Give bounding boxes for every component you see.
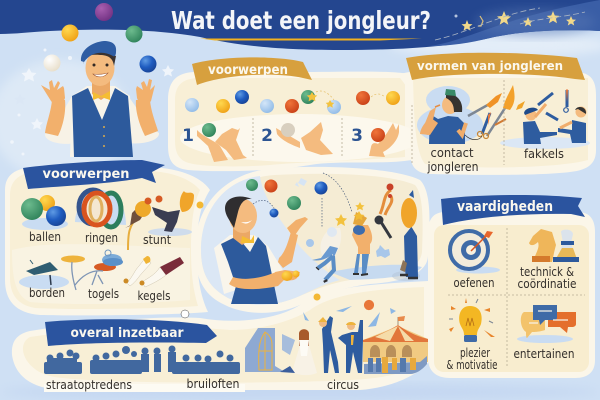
panel: vormen van jongleren: [398, 53, 596, 175]
label: oefenen: oefenen: [454, 276, 494, 290]
label: contact jongleren: jongleren: [427, 160, 478, 174]
banner: vaardigheden: [441, 195, 585, 225]
label: fakkels: fakkels: [524, 147, 564, 161]
crowd: bruiloften: [172, 350, 240, 374]
panel: voorwerpen steps: [168, 57, 420, 171]
performer 3 with flame: [392, 190, 420, 281]
label: plezier en motivatie: & motivatie: [446, 358, 498, 372]
label: plezier en motivatie: plezier: [460, 346, 490, 360]
step 3: [351, 123, 399, 157]
label: straatoptredens: straatoptredens: [46, 378, 132, 392]
label: bruiloften: bruiloften: [186, 377, 240, 391]
panel: overal inzetbaar: [12, 281, 430, 392]
label: entertainen: entertainen: [514, 347, 574, 361]
illustration: torches: [465, 85, 515, 140]
banner: overal inzetbaar: overal inzetbaar: [70, 326, 184, 341]
label: stunt: stunt: [143, 233, 171, 247]
step 3: 3: [351, 126, 363, 146]
icon: knight and pawn: [529, 229, 579, 262]
illustration: contact jongleren: [417, 86, 483, 144]
banner: vormen van jongleren: vormen van jongleren: [417, 58, 563, 73]
label: technick en coördinatie: coördinatie: [518, 277, 576, 291]
banner: voorwerpen gold: [192, 57, 312, 85]
crowd: straatoptredens: [44, 346, 176, 374]
label: circus: circus: [327, 378, 359, 392]
label: ballen: ballen: [29, 230, 61, 244]
church: [245, 328, 295, 372]
header band: [0, 0, 600, 50]
banner: voorwerpen gold: voorwerpen: [208, 62, 288, 78]
panel: vaardigheden: [428, 195, 595, 378]
illustration: fakkels: [500, 89, 590, 149]
stars and confetti: [295, 178, 390, 258]
icon: borden: [19, 260, 69, 289]
label: contact jongleren: contact: [430, 146, 474, 160]
step 2: 2: [261, 126, 273, 146]
label: borden: borden: [29, 286, 65, 300]
icon: togels: [61, 250, 123, 290]
banner: voorwerpen blue: voorwerpen: [42, 166, 130, 182]
banner: overal inzetbaar: [45, 319, 217, 346]
panel: center jugglers: [195, 167, 430, 313]
icon: ballen: [21, 195, 68, 230]
label: togels: togels: [88, 287, 119, 301]
juggler figure: [41, 41, 159, 157]
decoration: stars and music notes: [435, 8, 585, 40]
decorative white stars left: [10, 48, 174, 156]
people cheering: [318, 316, 363, 373]
icon: target: [448, 229, 500, 274]
center balls: [246, 173, 352, 228]
label: technick en coördinatie: [518, 265, 576, 291]
label: ringen: ringen: [85, 231, 118, 245]
icon: kegels: [124, 256, 184, 287]
confetti: [181, 294, 396, 327]
step balls: [185, 90, 400, 114]
label: kegels: kegels: [138, 289, 170, 303]
man juggler: [214, 196, 308, 304]
circus tent and crowd: [363, 316, 428, 374]
step 1: 1: [182, 126, 194, 146]
banner: vaardigheden: vaardigheden: [457, 199, 553, 215]
title: Wat doet een jongleur?: [171, 6, 431, 35]
bride: [280, 329, 317, 375]
icon: speech bubbles: [517, 305, 576, 343]
label: plezier en motivatie: [446, 346, 498, 372]
banner: vormen van jongleren: [406, 53, 585, 80]
panel: voorwerpen objects: [5, 160, 210, 315]
step 1: [182, 123, 247, 162]
icon: ringen: [75, 190, 126, 227]
banner: voorwerpen blue: [23, 160, 165, 189]
juggling balls above juggler: [44, 3, 156, 72]
key-shaped club: [374, 184, 394, 238]
icon: lightbulb: [449, 298, 495, 342]
performer 1: [312, 227, 341, 282]
step 2: [261, 122, 333, 155]
label: technick en coördinatie: technick &: [520, 265, 574, 279]
label: contact jongleren: [427, 146, 478, 174]
icon: stunt: [125, 191, 204, 250]
performer 2: [352, 211, 372, 275]
